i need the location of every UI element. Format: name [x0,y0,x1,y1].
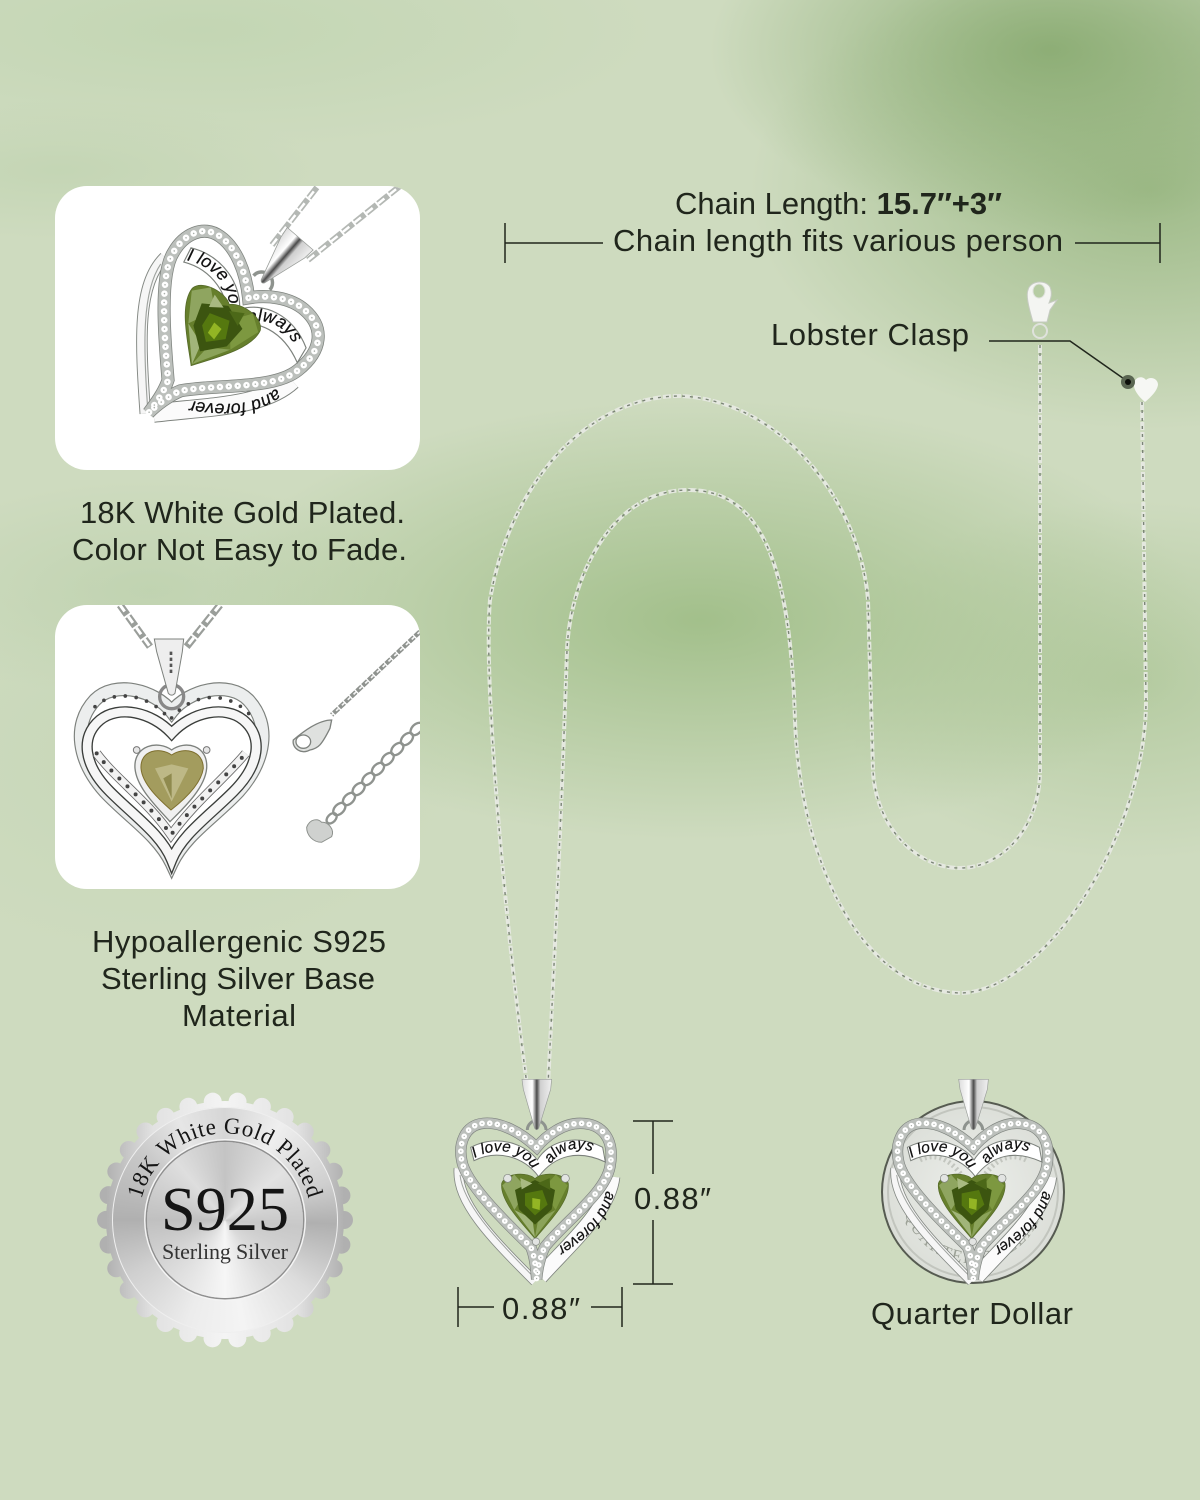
icon: heart tag [1134,377,1158,402]
caption: quarter dollar: Quarter Dollar [871,1296,1073,1331]
pendant on coin: and forever [996,1191,1050,1255]
caption: white gold: Color Not Easy to Fade. [72,532,407,567]
rotated pendant: I love you [187,249,238,303]
caption: sterling silver base [92,924,386,1033]
badge: S925 sterling silver seal [97,1092,353,1348]
caption: sterling silver base: Sterling Silver Base [101,961,375,996]
inner dotted bands [97,753,246,835]
icon: lobster clasp [1027,282,1057,338]
caption: sterling silver base: Hypoallergenic S925 [92,924,386,959]
badge: S925 sterling silver seal: 18K White Gold Plated [128,1118,324,1198]
arrow: lobster clasp leader [989,341,1135,389]
rotated pendant: always [252,308,300,342]
caption: sterling silver base: Material [182,998,296,1033]
gem back setting [133,747,140,753]
dimension: height: 0.88″ [634,1181,711,1216]
arrow: chain length dimension [505,223,1160,263]
heading: chain length [613,186,1063,258]
pendant on coin: always [982,1140,1030,1163]
rotated pendant: and forever [188,389,280,416]
caption: white gold: 18K White Gold Plated. [80,495,405,530]
badge: S925 sterling silver seal: Sterling Silver [162,1239,289,1264]
heading: chain length: Chain length fits various person [613,223,1063,258]
extender chain [332,632,420,715]
heading: chain length: Chain Length: 15.7″+3″ [675,186,1002,221]
label: lobster clasp: Lobster Clasp [771,317,969,352]
pendant with dimensions: I love you [472,1142,540,1168]
pendant on coin: I love you [908,1142,976,1168]
dimension: height [633,1121,711,1284]
badge: S925 sterling silver seal: S925 [161,1176,289,1244]
panel: white gold plated photo [55,186,420,470]
rotated pendant [136,224,325,423]
dimension: width [458,1287,622,1327]
lobster clasp [293,720,332,752]
pendant with dimensions [454,1079,620,1285]
pendant on coin [890,1079,1057,1285]
chain: inner strand [548,402,1146,1085]
pendant with dimensions: and forever [560,1191,614,1255]
tag heart [307,820,333,842]
dimension: width: 0.88″ [502,1291,580,1326]
chain in card [272,186,400,260]
chain: outer strand [489,345,1040,1085]
heart back outer band [81,689,263,863]
coin: quarter dollar [881,1100,1065,1284]
bail [154,639,184,695]
pendant with dimensions: always [546,1140,594,1163]
gem [184,284,261,366]
caption: white gold [72,495,407,567]
chain above bail [120,605,220,647]
panel: sterling silver back photo [55,605,425,889]
extender links [325,720,425,825]
coin: quarter dollar: QUARTER DOLLAR [906,1216,1038,1263]
